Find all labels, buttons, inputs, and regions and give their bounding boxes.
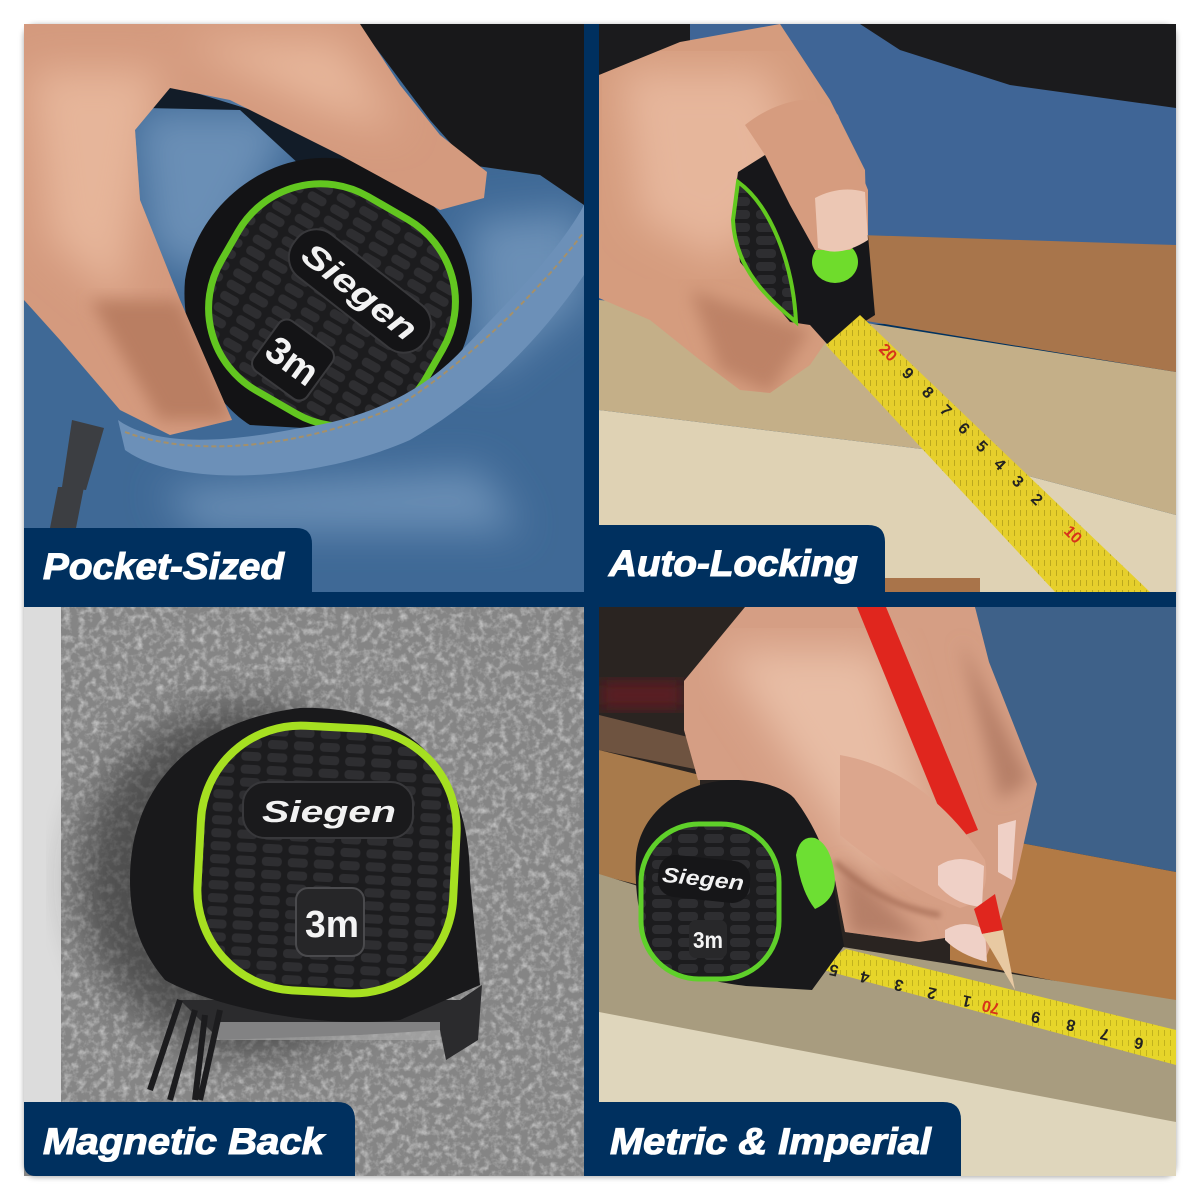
label: Magnetic Back: Magnetic Back	[43, 1121, 327, 1162]
label: Metric and Imperial	[585, 1102, 961, 1176]
yellow tape strip: 10	[1060, 523, 1085, 547]
thumbnail	[815, 190, 868, 252]
yellow tape strip: 6	[954, 420, 973, 438]
pocket stitching	[125, 232, 584, 446]
size badge	[296, 888, 364, 956]
yellow tape strip: 3	[1008, 473, 1027, 491]
pencil tip wood	[982, 930, 1015, 990]
label: Magnetic Back	[24, 1102, 355, 1176]
size badge	[689, 920, 727, 958]
yellow tape strip: 4	[859, 967, 871, 986]
board front face	[599, 410, 1176, 592]
cord	[150, 1000, 220, 1100]
yellow tape strip: 7	[1099, 1024, 1111, 1043]
brown background band	[599, 750, 700, 900]
board front face	[599, 1000, 1176, 1176]
yellow tape strip: 70	[980, 996, 1002, 1017]
blue clothing	[975, 607, 1176, 872]
hand highlight	[30, 40, 400, 420]
blurred red object	[599, 680, 684, 710]
bottom brown	[885, 578, 980, 592]
texture	[60, 607, 584, 1176]
denim highlights	[135, 110, 584, 530]
panel: auto-locking	[599, 24, 1176, 592]
black belt and shirt	[358, 24, 584, 205]
lanyard	[50, 420, 104, 528]
brand plate	[288, 228, 432, 354]
black shirt	[599, 24, 1176, 108]
hand highlight	[720, 640, 1030, 940]
label: Metric and Imperial: Metric & Imperial	[610, 1121, 932, 1162]
grey textured wall	[24, 607, 584, 1176]
tape numbers: 9	[898, 365, 917, 383]
pencil lower	[974, 894, 1003, 934]
yellow tape strip: 8	[1065, 1015, 1077, 1034]
dark gap under hand	[153, 88, 350, 161]
brown wood beam	[950, 835, 1176, 1005]
yellow tape strip: 3	[893, 975, 905, 994]
centre divider: vertical	[584, 24, 599, 1176]
yellow tape strip: 2	[926, 983, 938, 1002]
pocket edge	[118, 205, 584, 475]
fingernails	[938, 820, 1016, 962]
pencil	[857, 607, 978, 840]
hand	[684, 607, 1037, 960]
blue jeans background	[599, 24, 1176, 324]
metal hook	[180, 985, 482, 1060]
brand name: Siegen	[295, 235, 425, 348]
thumb	[745, 100, 868, 250]
brand plate	[243, 782, 413, 838]
yellow tape strip: 7	[936, 402, 955, 420]
shadow	[80, 705, 420, 1055]
centre divider: horizontal	[24, 592, 1176, 607]
panel: pocket-sized	[24, 24, 584, 592]
yellow tape strip: 2	[1027, 491, 1046, 509]
yellow tape strip: 5	[972, 438, 991, 456]
tape numbers: 5	[828, 960, 840, 979]
brand plate	[656, 853, 752, 905]
yellow tape strip: 1	[961, 991, 973, 1010]
size text: 3m	[305, 904, 359, 946]
label: Auto-Locking: Auto-Locking	[608, 543, 858, 584]
tape measure side	[733, 155, 875, 345]
hand highlight	[620, 70, 810, 393]
label: Pocket-Sized: Pocket-Sized	[43, 546, 285, 587]
denim jeans background	[24, 24, 584, 592]
panel: metric and imperial	[599, 607, 1176, 1176]
light strip	[24, 607, 61, 1102]
size text: 3m	[693, 927, 723, 953]
yellow tape strip: 6	[1133, 1033, 1145, 1052]
size text: 3m	[257, 328, 326, 395]
hand	[24, 24, 487, 435]
green button	[812, 248, 858, 283]
finger crease shadow	[835, 862, 940, 915]
brand name: Siegen	[262, 794, 396, 829]
brown wood beam	[860, 235, 1176, 372]
yellow tape strip: 20	[875, 341, 900, 365]
yellow tape strip	[816, 949, 1176, 1065]
board top surface	[599, 874, 1176, 1122]
panel: magnetic back	[24, 607, 584, 1176]
yellow tape strip: 4	[990, 456, 1009, 474]
yellow tape strip: 8	[918, 384, 937, 402]
index finger over pencil	[840, 755, 986, 908]
board top surface	[599, 300, 1176, 515]
upper brown shelf	[599, 715, 700, 770]
tape measure: board	[636, 780, 844, 990]
label: Auto-Locking	[585, 525, 885, 600]
label: Pocket-Sized	[24, 528, 312, 600]
hand	[599, 24, 868, 393]
face	[733, 182, 796, 322]
brand name: Siegen	[661, 864, 745, 895]
green button	[796, 838, 835, 909]
tape measure: pocket	[184, 158, 472, 428]
yellow tape strip	[826, 315, 1150, 592]
yellow tape strip: 9	[1030, 1007, 1042, 1026]
size badge	[251, 318, 335, 402]
tape measure: wall	[130, 708, 482, 1060]
dark workshop background	[599, 607, 1176, 1176]
